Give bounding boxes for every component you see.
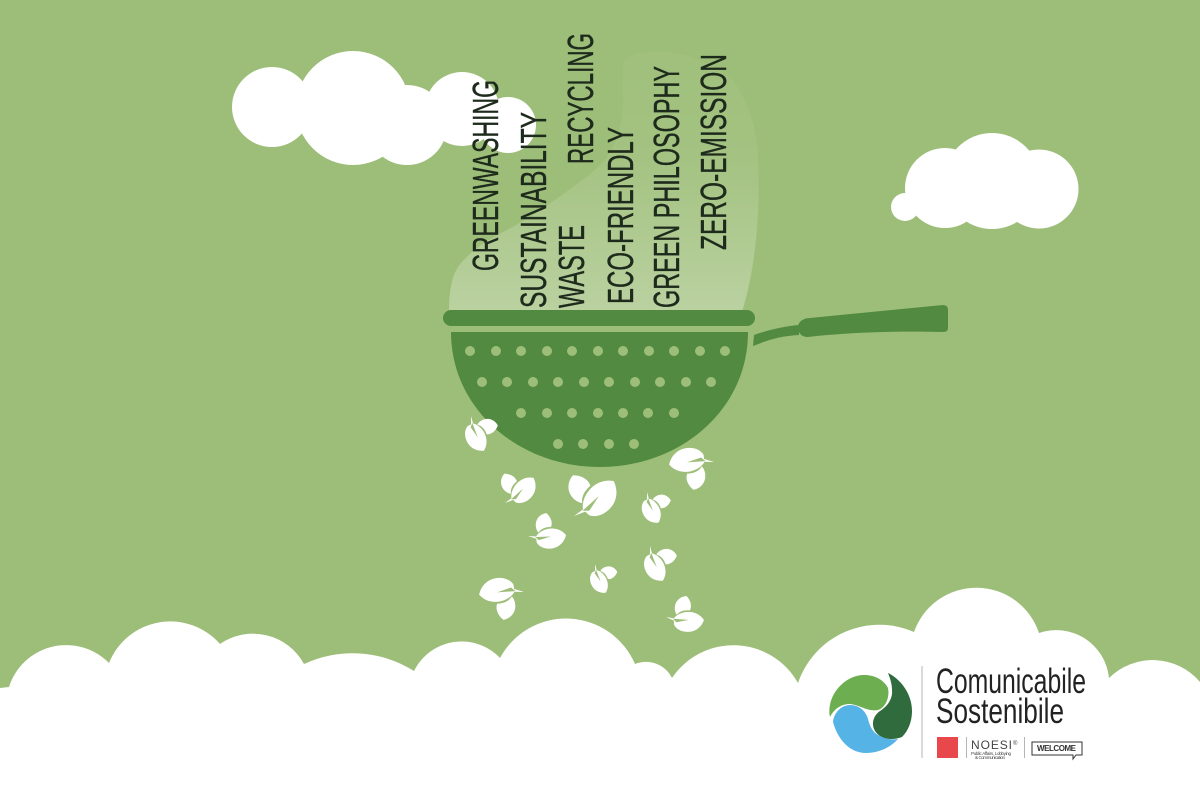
icon: leaf 7 — [475, 574, 526, 623]
icon: leaf 10 — [663, 592, 710, 637]
partner: NOESI: NOESI — [971, 738, 1012, 752]
word: eco-friendly: ECO-FRIENDLY — [600, 127, 641, 304]
partner: NOESI: Public Affairs, Lobbying — [971, 751, 1011, 756]
falling leaves — [463, 414, 716, 637]
strainer holes — [465, 346, 730, 449]
strainer — [443, 305, 948, 467]
steam rising from strainer — [449, 52, 759, 312]
strainer handle — [753, 305, 948, 346]
icon: leaf 3 — [558, 460, 625, 526]
partner: WELCOME — [1032, 742, 1082, 759]
logo divider — [922, 666, 923, 758]
icon: leaf 2 — [493, 463, 541, 510]
partner: WELCOME: WELCOME — [1037, 744, 1077, 753]
icon: leaf 4 — [640, 490, 673, 524]
vertical words — [465, 33, 734, 308]
logo: Comunicabile Sostenibile — [829, 662, 1086, 760]
icon: leaf 8 — [589, 562, 619, 594]
logo wordmark: Comunicabile — [936, 662, 1086, 701]
bottom cloud band — [0, 588, 1200, 798]
word: waste: WASTE — [551, 225, 592, 308]
logo: Comunicabile Sostenibile: Sostenibile — [936, 692, 1064, 731]
strainer rim — [443, 310, 755, 326]
icon: leaf 9 — [642, 544, 679, 582]
partner: red mark — [937, 737, 958, 758]
cloud: top left — [232, 51, 536, 165]
strainer bowl — [451, 332, 748, 467]
icon: leaf 5 — [526, 510, 570, 552]
partner: NOESI — [971, 738, 1018, 760]
partner: NOESI: ® — [1013, 740, 1018, 747]
logo mark — [829, 673, 912, 753]
icon: leaf 1 — [463, 414, 500, 452]
partner: NOESI: & Communication — [975, 755, 1005, 760]
word: sustainability: SUSTAINABILITY — [513, 112, 554, 308]
cloud: top right — [891, 133, 1078, 229]
icon: leaf 6 — [665, 444, 716, 493]
